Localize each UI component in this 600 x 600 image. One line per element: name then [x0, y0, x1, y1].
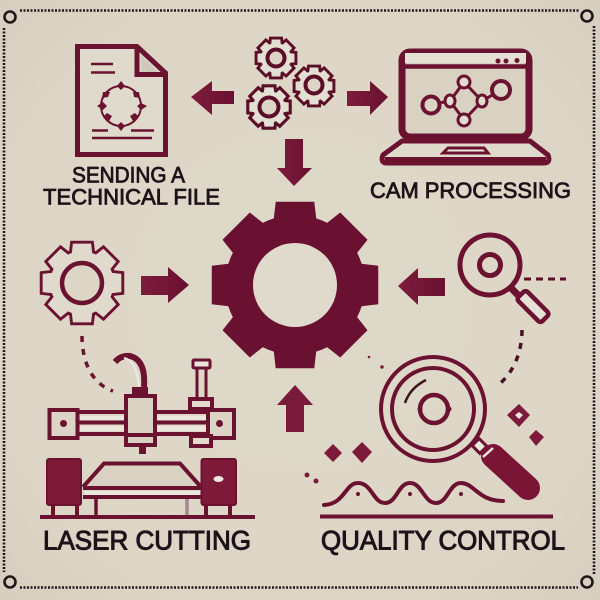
icon: small magnifier [460, 235, 566, 323]
arrow: down to central gear [277, 139, 312, 186]
heading: sending a technical file: SENDING A [72, 162, 185, 188]
icon: central gear [212, 202, 378, 368]
icon: laptop [382, 52, 549, 163]
dashed connector: small magnifier to quality control [497, 330, 522, 386]
heading: quality control: QUALITY CONTROL [321, 526, 565, 556]
icon: outlined gear [43, 244, 121, 322]
arrow: to CAM processing [347, 81, 388, 115]
icon: large magnifier [381, 357, 528, 488]
arrow: gear to center [141, 267, 189, 303]
dashed connector: gear to laser cutter [82, 336, 113, 391]
icon: three small gears [249, 40, 332, 127]
icon: laser cutting machine [40, 356, 255, 517]
heading: laser cutting: LASER CUTTING [43, 526, 251, 556]
chart: quality wave [320, 483, 553, 516]
arrow: magnifier to center [398, 268, 445, 305]
arrow: up to center [277, 385, 313, 432]
decorative diamonds [304, 356, 544, 484]
heading: sending a technical file: TECHNICAL FILE [43, 184, 220, 210]
heading: CAM processing: CAM PROCESSING [370, 178, 571, 203]
heading: sending a technical file [43, 162, 220, 210]
icon: technical file document [78, 46, 166, 154]
arrow: to technical file [191, 81, 234, 115]
